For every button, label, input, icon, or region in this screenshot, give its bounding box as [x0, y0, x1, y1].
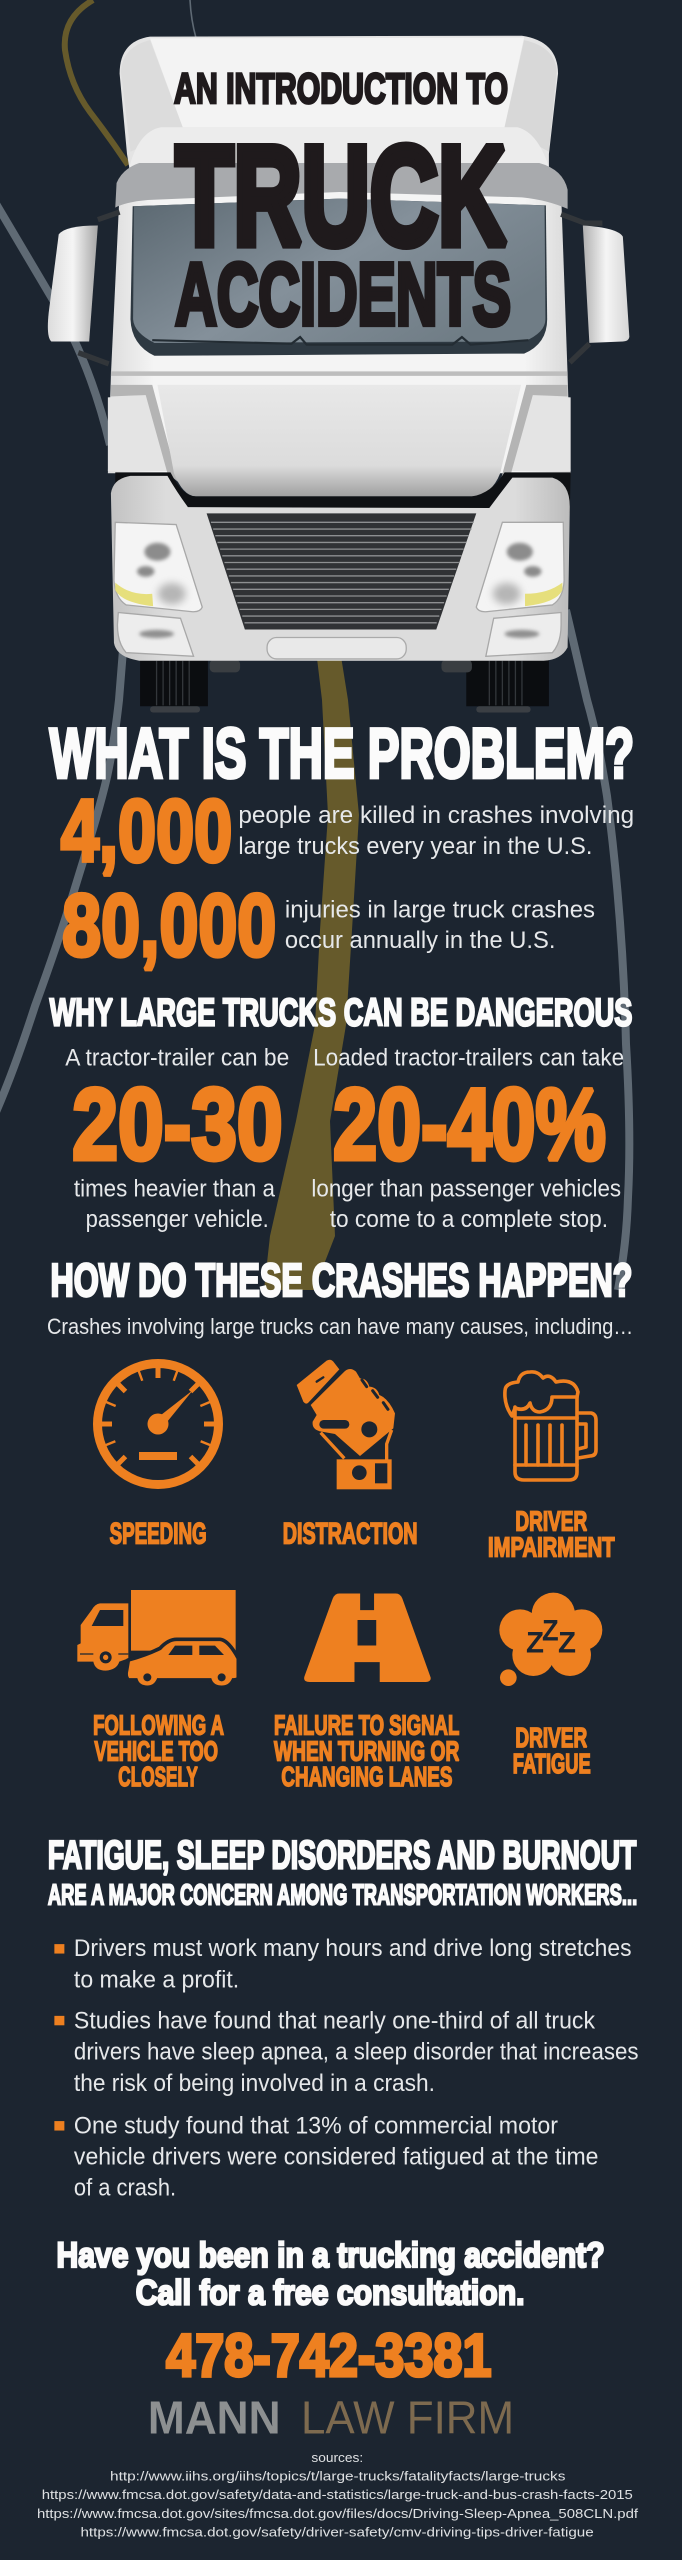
- sources: http://www.iihs.org/iihs/topics/t/large-trucks/fatalityfacts/large-trucks: [110, 2469, 565, 2484]
- sources: [37, 2450, 639, 2540]
- icon: hand holding phone: [297, 1360, 395, 1489]
- heading: fatigue: [48, 1833, 637, 1911]
- bullet: work hours: [54, 1934, 632, 1993]
- truck wipers: [152, 337, 528, 345]
- truck cab body: [108, 192, 571, 473]
- truck windshield glass: [133, 199, 545, 343]
- icon: sleep cloud: Z: [558, 1627, 576, 1660]
- truck side panels and hood: [108, 371, 571, 496]
- label: failure to signal: CHANGING LANES: [281, 1761, 452, 1792]
- icon: sleep cloud: [499, 1593, 602, 1686]
- truck dark gap under hood: [115, 472, 571, 513]
- bullet: work hours: to make a profit.: [74, 1966, 239, 1993]
- truck left fog light: [117, 613, 194, 656]
- road: yellow curve upper: [65, 0, 128, 165]
- road: yellow center line: [264, 650, 359, 1290]
- title: ACCIDENTS: [175, 246, 511, 344]
- label: distraction: DISTRACTION: [283, 1518, 418, 1551]
- label: driver impairment: DRIVER: [515, 1506, 587, 1536]
- truck right side mirror: [561, 214, 629, 363]
- road: top thin line: [190, 0, 196, 38]
- icon: speedometer: [98, 1364, 218, 1484]
- sources: sources:: [311, 2450, 363, 2465]
- truck sun visor: [115, 163, 568, 209]
- truck plate: [267, 638, 406, 659]
- bullet: 13% fatigued: [54, 2112, 598, 2201]
- truck windshield frame: [130, 199, 547, 356]
- label: driver fatigue: [513, 1722, 591, 1779]
- truck cargo box: [120, 36, 558, 170]
- label: failure to signal: WHEN TURNING OR: [274, 1735, 459, 1766]
- bullet: sleep apnea: Studies have found that nearly one-third of all truck: [74, 2007, 596, 2034]
- stat: 80,000 injuries: 80,000: [62, 876, 276, 975]
- label: following a vehicle too closely: CLOSELY: [118, 1761, 198, 1792]
- bullet: sleep apnea: [54, 2007, 639, 2096]
- bullet: sleep apnea: drivers have sleep apnea, a sleep disorder that increases: [74, 2038, 639, 2065]
- stat: 20-40% longer stop: [311, 1045, 624, 1233]
- road: left edge line lower: [0, 650, 123, 1112]
- truck right headlight: [476, 522, 564, 612]
- icon: road: [304, 1593, 431, 1682]
- stat: 80,000 injuries: [62, 876, 595, 975]
- icon: beer mug: [505, 1372, 596, 1480]
- sources: https://www.fmcsa.dot.gov/safety/driver-safety/cmv-driving-tips-driver-fatigue: [80, 2525, 594, 2540]
- bullet: work hours: Drivers must work many hours and drive long stretches: [74, 1934, 632, 1961]
- road: right edge line: [566, 610, 629, 1290]
- icon: sleep cloud: Z: [542, 1615, 559, 1648]
- truck grille: [207, 513, 476, 629]
- sources: https://www.fmcsa.dot.gov/sites/fmcsa.dot.gov/files/docs/Driving-Sleep-Apnea_508CLN.pdf: [37, 2507, 639, 2521]
- logo: mann law firm: [148, 2391, 514, 2444]
- bullet: 13% fatigued: vehicle drivers were considered fatigued at the time: [74, 2143, 598, 2170]
- label: failure to signal: FAILURE TO SIGNAL: [274, 1710, 459, 1740]
- road: left edge line upper: [0, 202, 110, 445]
- stat: 20-40% longer stop: to come to a complete stop.: [330, 1206, 608, 1233]
- stat: 20-30 times heavier: passenger vehicle.: [86, 1206, 269, 1233]
- logo: mann law firm: MANN: [148, 2391, 281, 2444]
- section: crash causes text and road icon: [47, 1315, 633, 1792]
- bullet: 13% fatigued: One study found that 13% of commercial motor: [74, 2112, 558, 2139]
- truck illustration: [48, 36, 629, 713]
- stat: 4,000 killed: people are killed in crashes involving: [238, 801, 634, 829]
- section: fatigue, call to action and sources: [37, 1833, 639, 2540]
- bullet: sleep apnea: the risk of being involved in a crash.: [74, 2069, 435, 2096]
- section: crash causes text and road icon: SPEEDING: [110, 1518, 207, 1551]
- stat: 4,000 killed: 4,000: [61, 782, 232, 881]
- label: driver fatigue: FATIGUE: [513, 1748, 591, 1779]
- stat: 20-30 times heavier: [65, 1045, 289, 1233]
- stat: 4,000 killed: large trucks every year in the U.S.: [238, 832, 592, 860]
- stat: 4,000 killed: [61, 782, 634, 881]
- truck left headlight: [114, 522, 202, 612]
- bullet: 13% fatigued: of a crash.: [74, 2174, 176, 2201]
- truck left side mirror: [48, 212, 120, 364]
- title: [174, 65, 511, 344]
- truck right fog light: [486, 613, 561, 656]
- truck bumper: [111, 476, 570, 661]
- truck tires: [140, 656, 549, 713]
- call to action: Have you been in a trucking accident?: [57, 2236, 605, 2275]
- sources: https://www.fmcsa.dot.gov/safety/data-and-statistics/large-truck-and-bus-crash-facts-2015: [42, 2488, 633, 2502]
- stat: 20-40% longer stop: longer than passenger vehicles: [311, 1176, 621, 1202]
- title: AN INTRODUCTION TO: [174, 65, 508, 112]
- stat: 80,000 injuries: occur annually in the U.S.: [285, 926, 555, 954]
- stat: 20-30 times heavier: 20-30: [72, 1069, 283, 1182]
- stat: 20-30 times heavier: A tractor-trailer can be: [65, 1045, 289, 1071]
- label: driver impairment: [488, 1506, 615, 1562]
- label: failure to signal: [274, 1710, 459, 1792]
- stat: 20-30 times heavier: times heavier than a: [74, 1176, 276, 1202]
- section: what is the problem and why dangerous: [50, 714, 634, 1306]
- label: following a vehicle too closely: FOLLOWING A: [93, 1710, 224, 1740]
- logo: mann law firm: LAW FIRM: [301, 2391, 514, 2444]
- icon: sleep cloud: Z: [526, 1627, 544, 1660]
- title: TRUCK: [176, 118, 506, 275]
- icon: truck following car: [77, 1590, 238, 1687]
- call to action: Call for a free consultation.: [136, 2273, 525, 2313]
- label: following a vehicle too closely: [93, 1710, 224, 1792]
- call to action: [57, 2236, 605, 2313]
- truck cab roof: [128, 127, 550, 172]
- label: driver fatigue: DRIVER: [515, 1722, 587, 1753]
- label: following a vehicle too closely: VEHICLE TOO: [94, 1735, 218, 1766]
- stat: 20-40% longer stop: Loaded tractor-trailers can take: [313, 1045, 624, 1071]
- phone number: 478-742-3381: [166, 2323, 491, 2389]
- stat: 80,000 injuries: injuries in large truck crashes: [285, 895, 595, 923]
